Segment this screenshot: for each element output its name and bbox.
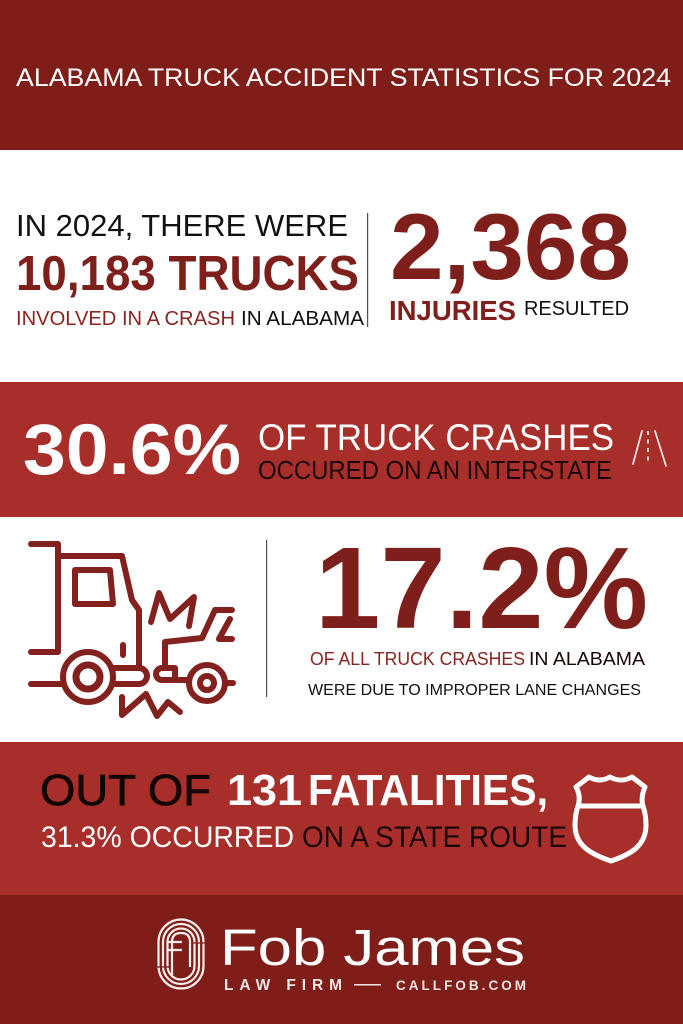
big number: 17.2%: [315, 523, 648, 653]
icon: route shield: [575, 777, 646, 861]
logo wordmark: Fob James: [220, 919, 525, 976]
panel: trucks and injuries: [16, 194, 631, 330]
text block: [258, 417, 614, 485]
panel: interstate stat: [0, 382, 683, 517]
text block: fatalities: [40, 766, 567, 854]
panel: fatalities stat: [0, 742, 683, 895]
title: ALABAMA TRUCK ACCIDENT STATISTICS FOR 2024: [16, 64, 671, 92]
text block: injuries: RESULTED: [524, 298, 629, 320]
text block: OCCURED ON AN INTERSTATE: [258, 455, 612, 485]
text block: OF ALL TRUCK CRASHES: [310, 649, 525, 669]
text block: trucks in crash: 10,183 TRUCKS: [16, 247, 359, 301]
header panel: [0, 0, 683, 150]
text block: trucks in crash: [16, 208, 365, 330]
icon: truck crash: [31, 544, 233, 716]
logo mark: [157, 920, 205, 988]
text block: fatalities: OUT OF: [40, 766, 211, 815]
big number: 30.6%: [23, 411, 241, 490]
logo tagline: [224, 977, 526, 994]
icon: road: [633, 431, 666, 466]
text block: injuries: 2,368: [390, 194, 631, 299]
text block: OF TRUCK CRASHES: [258, 417, 614, 458]
text block: IN ALABAMA: [529, 649, 645, 669]
text block: fatalities: FATALITIES,: [308, 766, 548, 815]
panel: footer: [0, 895, 683, 1024]
text block: WERE DUE TO IMPROPER LANE CHANGES: [308, 682, 641, 699]
text block: trucks in crash: IN 2024, THERE WERE: [16, 208, 348, 243]
panel: lane change stat: [31, 523, 648, 716]
text block: fatalities: ON A STATE ROUTE: [302, 821, 567, 854]
text block: fatalities: 31.3% OCCURRED: [41, 821, 294, 854]
logo tagline: LAW FIRM: [224, 977, 342, 994]
text block: injuries: INJURIES: [389, 295, 516, 326]
text block: trucks in crash: IN ALABAMA: [241, 308, 365, 330]
logo tagline: CALLFOB.COM: [396, 978, 526, 993]
text block: trucks in crash: INVOLVED IN A CRASH: [16, 308, 235, 330]
text block: fatalities: 131: [227, 766, 302, 815]
text block: [308, 649, 645, 699]
